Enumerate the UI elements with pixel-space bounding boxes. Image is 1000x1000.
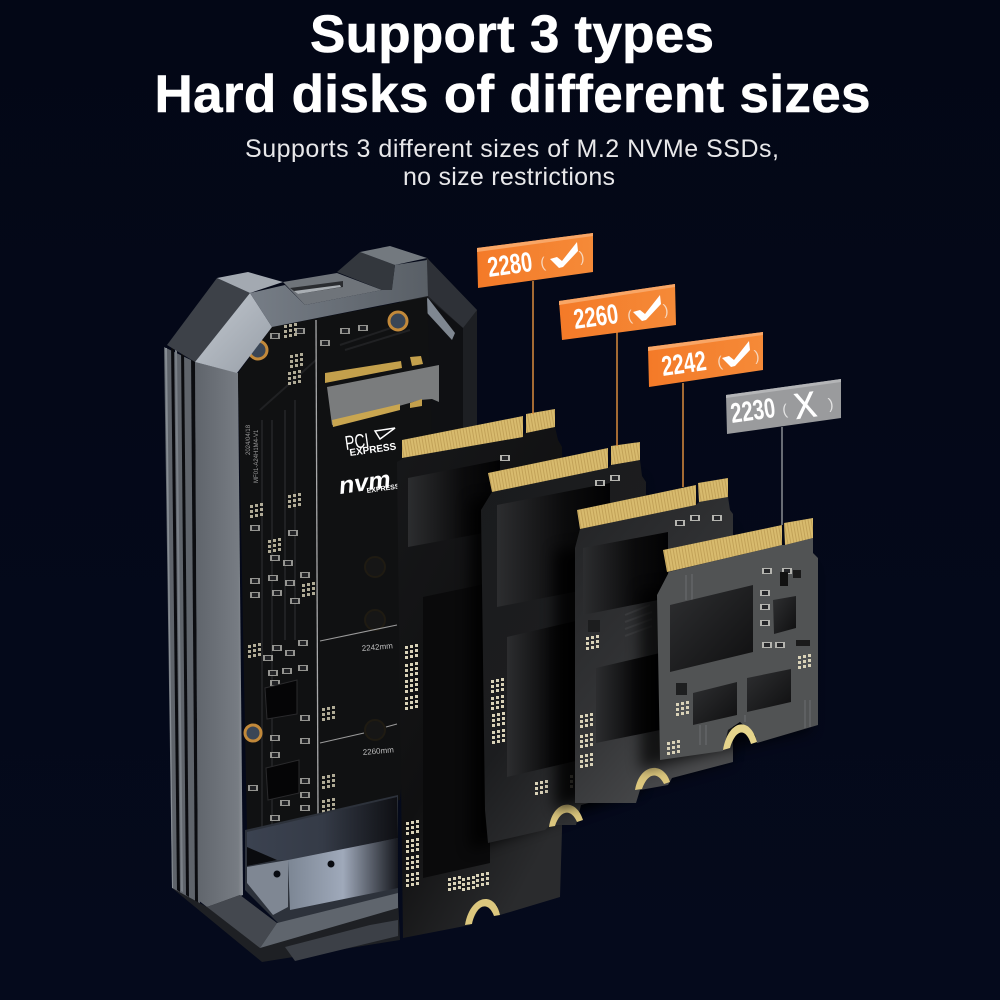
board traces [686, 574, 810, 745]
title: Support 3 types [310, 5, 714, 64]
connector line 2242 [682, 383, 684, 487]
NVM Express logo: nvm [337, 466, 392, 500]
label 2230: ) [827, 395, 835, 413]
title: Hard disks of different sizes [154, 65, 870, 124]
subtitle: Supports 3 different sizes of M.2 NVMe SSDs, [245, 135, 779, 163]
connector notch [283, 273, 382, 305]
pocket shadow wedge [247, 847, 277, 866]
shadow: card four [640, 570, 810, 770]
connector fingers [488, 448, 608, 492]
label 2260 [559, 284, 676, 340]
SSD 2230 [657, 518, 818, 760]
subtitle: no size restrictions [403, 163, 615, 191]
small flash chips [693, 669, 791, 725]
board components [248, 323, 368, 821]
pocket bracket [247, 838, 398, 915]
connector fingers [402, 416, 523, 458]
label 2230: ( [781, 401, 789, 419]
connector fingers [577, 485, 696, 529]
connector line 2230 [781, 427, 783, 525]
controller chip [773, 596, 796, 634]
mounting holes [365, 557, 385, 740]
connector fingers [663, 525, 782, 572]
size marker lines [320, 625, 397, 743]
enclosure right wall [400, 258, 477, 560]
pad rows [405, 644, 489, 891]
side strip [195, 362, 243, 907]
gold screw holes [245, 312, 407, 741]
card chips [497, 483, 610, 607]
small square chip [588, 620, 600, 632]
label 2230 [726, 379, 841, 434]
board divider line [316, 320, 318, 815]
dark top bump [337, 252, 395, 290]
NVM Express logo: EXPRESS [366, 483, 400, 495]
label 2280 [477, 233, 593, 288]
SSD 2260 [481, 442, 646, 843]
top left upper facet [217, 272, 283, 293]
title [154, 5, 870, 124]
label 2280: ( [539, 254, 547, 272]
card chips [583, 532, 668, 615]
pad rows [580, 635, 599, 768]
mounting notch [465, 899, 500, 925]
label 2230: X [791, 383, 819, 427]
pocket upper surface [247, 797, 398, 866]
board size labels: 2242mm [361, 641, 394, 653]
top left dark facet [167, 278, 250, 362]
icon: check [550, 242, 578, 268]
bottom frame [172, 888, 400, 962]
vertical board code: 2024/04/18 [246, 424, 252, 455]
pad rows [491, 678, 583, 795]
label 2242: ) [753, 347, 761, 365]
M.2 slot [325, 356, 439, 427]
mounting notch [635, 768, 670, 790]
card body [657, 538, 818, 760]
card body [397, 427, 562, 938]
SSD 2280 [397, 409, 562, 938]
label 2230: 2230 [729, 393, 777, 430]
small components [500, 455, 620, 486]
board size labels [361, 641, 395, 757]
SSD 2242 [575, 478, 733, 803]
large flash chip [670, 585, 753, 672]
label 2280: ) [578, 248, 586, 266]
connector line 2260 [616, 332, 618, 446]
connector line 2280 [532, 281, 534, 414]
board size labels: 2260mm [362, 745, 395, 757]
PCI Express logo [344, 428, 397, 459]
mounting notch [549, 805, 583, 827]
label 2242 [648, 332, 763, 387]
trace hatch [625, 605, 652, 636]
label 2242: 2242 [660, 346, 708, 383]
small square chip [676, 683, 687, 695]
bevel facet [195, 293, 272, 373]
pad rows [667, 654, 811, 755]
PCI Express logo: EXPRESS [349, 441, 397, 459]
icon: check [722, 341, 750, 367]
board traces [260, 325, 410, 830]
vertical board code: MF01-A24H1M4-V1 [254, 429, 260, 483]
card body [481, 460, 646, 843]
vertical board code [246, 424, 260, 483]
subtitle [245, 135, 779, 191]
card chips [408, 460, 500, 547]
mounting notch [723, 724, 757, 750]
small components [675, 515, 722, 526]
M.2 enclosure [164, 246, 477, 962]
label 2260: 2260 [572, 299, 620, 336]
label 2260: ) [662, 301, 670, 319]
label 2260: ( [626, 307, 634, 325]
board IC chips [265, 680, 299, 800]
heat sink fins [164, 343, 200, 905]
card body [575, 497, 733, 803]
shadow: card three [555, 530, 730, 810]
label 2242: ( [716, 353, 724, 371]
icon: check [633, 295, 661, 321]
shadow: card two [470, 480, 640, 850]
label 2280: 2280 [486, 247, 534, 284]
capacitors [760, 568, 810, 648]
top frame [250, 260, 428, 327]
circuit board [238, 297, 432, 832]
pocket backing [245, 795, 398, 925]
PCI Express logo: PCI [344, 430, 370, 455]
